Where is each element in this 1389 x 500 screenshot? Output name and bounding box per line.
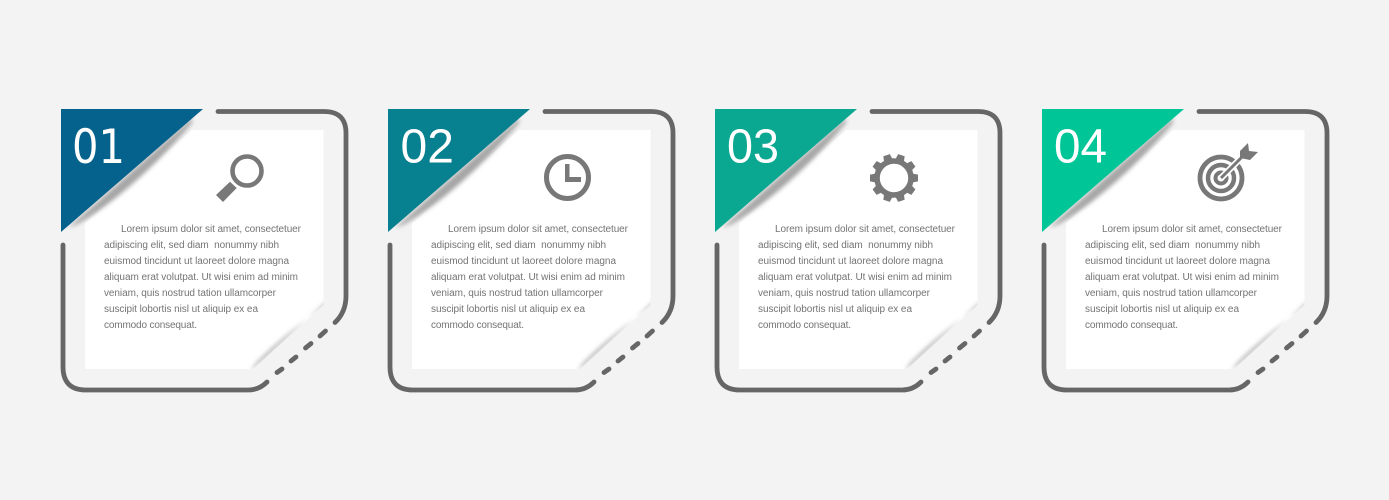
body text: Lorem ipsum dolor sit amet, consectetuer — [775, 224, 956, 235]
number: 02 — [400, 120, 454, 174]
outline frame — [390, 112, 673, 390]
number: 01 — [72, 120, 125, 175]
body text — [104, 224, 302, 331]
number triangle — [61, 109, 203, 232]
body text: euismod tincidunt ut laoreet dolore magna — [431, 256, 616, 267]
fold shadow top — [68, 118, 192, 228]
outline frame — [1044, 112, 1327, 390]
white content card — [1066, 130, 1304, 369]
body text: commodo consequat. — [758, 320, 851, 331]
body text — [431, 224, 629, 331]
outline frame — [717, 112, 1000, 390]
body text: suscipit lobortis nisl ut aliquip ex ea — [1085, 304, 1239, 315]
body text: Lorem ipsum dolor sit amet, consectetuer — [1102, 224, 1283, 235]
icon: magnifier — [216, 156, 262, 202]
body text — [758, 224, 956, 331]
body text: veniam, quis nostrud tation ullamcorper — [431, 288, 604, 299]
white content card — [412, 130, 650, 369]
body text: commodo consequat. — [1085, 320, 1178, 331]
white content card — [739, 130, 978, 369]
number: 03 — [727, 120, 779, 174]
body text: adipiscing elit, sed diam nonummy nibh — [1085, 240, 1260, 251]
body text: commodo consequat. — [104, 320, 197, 331]
number triangle — [388, 109, 530, 232]
body text: Lorem ipsum dolor sit amet, consectetuer — [448, 224, 629, 235]
body text: aliquam erat volutpat. Ut wisi enim ad minim — [1085, 272, 1279, 283]
body text: adipiscing elit, sed diam nonummy nibh — [104, 240, 279, 251]
fold shadow bottom — [904, 302, 980, 372]
panel: step 02 — [388, 109, 673, 390]
fold shadow top — [395, 118, 519, 228]
icon: gear — [870, 154, 918, 202]
body text: aliquam erat volutpat. Ut wisi enim ad minim — [104, 272, 298, 283]
number triangle — [715, 109, 857, 232]
body text: suscipit lobortis nisl ut aliquip ex ea — [431, 304, 585, 315]
body text: euismod tincidunt ut laoreet dolore magna — [1085, 256, 1270, 267]
fold shadow bottom — [250, 302, 326, 372]
fold shadow top — [722, 118, 846, 228]
number: 04 — [1054, 120, 1107, 174]
body text: veniam, quis nostrud tation ullamcorper — [1085, 288, 1258, 299]
number triangle — [1042, 109, 1184, 232]
body text: suscipit lobortis nisl ut aliquip ex ea — [758, 304, 912, 315]
fold shadow bottom — [1231, 302, 1307, 372]
fold shadow top — [1049, 118, 1173, 228]
body text: adipiscing elit, sed diam nonummy nibh — [431, 240, 606, 251]
body text: veniam, quis nostrud tation ullamcorper — [758, 288, 931, 299]
body text: commodo consequat. — [431, 320, 524, 331]
fold shadow bottom — [577, 302, 653, 372]
panel: step 03 — [715, 109, 1000, 390]
white content card — [85, 130, 324, 369]
body text: aliquam erat volutpat. Ut wisi enim ad minim — [431, 272, 625, 283]
body text: veniam, quis nostrud tation ullamcorper — [104, 288, 277, 299]
icon: target with arrow — [1200, 143, 1258, 199]
icon: clock — [546, 156, 588, 198]
body text: suscipit lobortis nisl ut aliquip ex ea — [104, 304, 258, 315]
outline frame — [63, 112, 346, 390]
panel: step 01 — [61, 109, 346, 390]
body text: Lorem ipsum dolor sit amet, consectetuer — [121, 224, 302, 235]
body text — [1085, 224, 1283, 331]
body text: adipiscing elit, sed diam nonummy nibh — [758, 240, 933, 251]
body text: euismod tincidunt ut laoreet dolore magna — [104, 256, 289, 267]
body text: euismod tincidunt ut laoreet dolore magna — [758, 256, 943, 267]
panel: step 04 — [1042, 109, 1327, 390]
body text: aliquam erat volutpat. Ut wisi enim ad minim — [758, 272, 952, 283]
